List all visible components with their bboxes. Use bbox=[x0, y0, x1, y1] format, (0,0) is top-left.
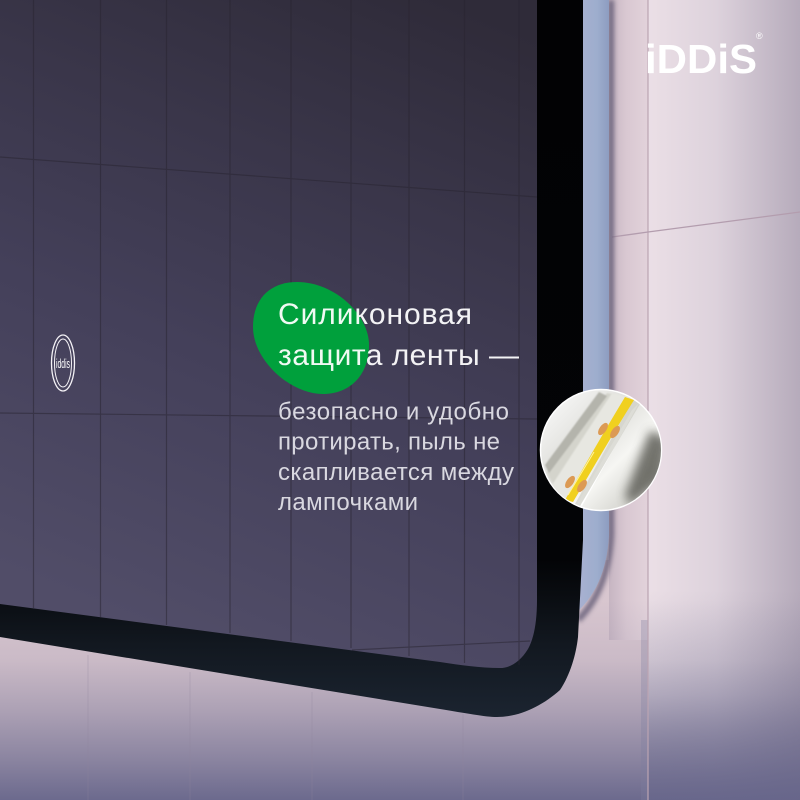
touch button icon bbox=[52, 335, 74, 391]
body text: протирать, пыль не bbox=[278, 428, 500, 456]
heading: Силиконовая bbox=[278, 298, 472, 331]
body text: безопасно и удобно bbox=[278, 398, 509, 426]
heading bbox=[278, 298, 519, 372]
green blob bbox=[253, 282, 369, 394]
mirror glass with reflected tiles bbox=[0, 0, 537, 668]
mirror frame bbox=[0, 0, 583, 717]
heading: защита ленты — bbox=[278, 339, 519, 372]
logo: ® bbox=[756, 31, 763, 41]
logo: iDDiS bbox=[645, 36, 757, 82]
inset photo: LED strip bbox=[540, 390, 668, 510]
body text: лампочками bbox=[278, 489, 418, 516]
body text: скапливается между bbox=[278, 459, 514, 486]
body text bbox=[278, 398, 514, 516]
touch button icon: iddis bbox=[56, 356, 70, 371]
blue backlight glow behind mirror bbox=[570, 0, 611, 620]
